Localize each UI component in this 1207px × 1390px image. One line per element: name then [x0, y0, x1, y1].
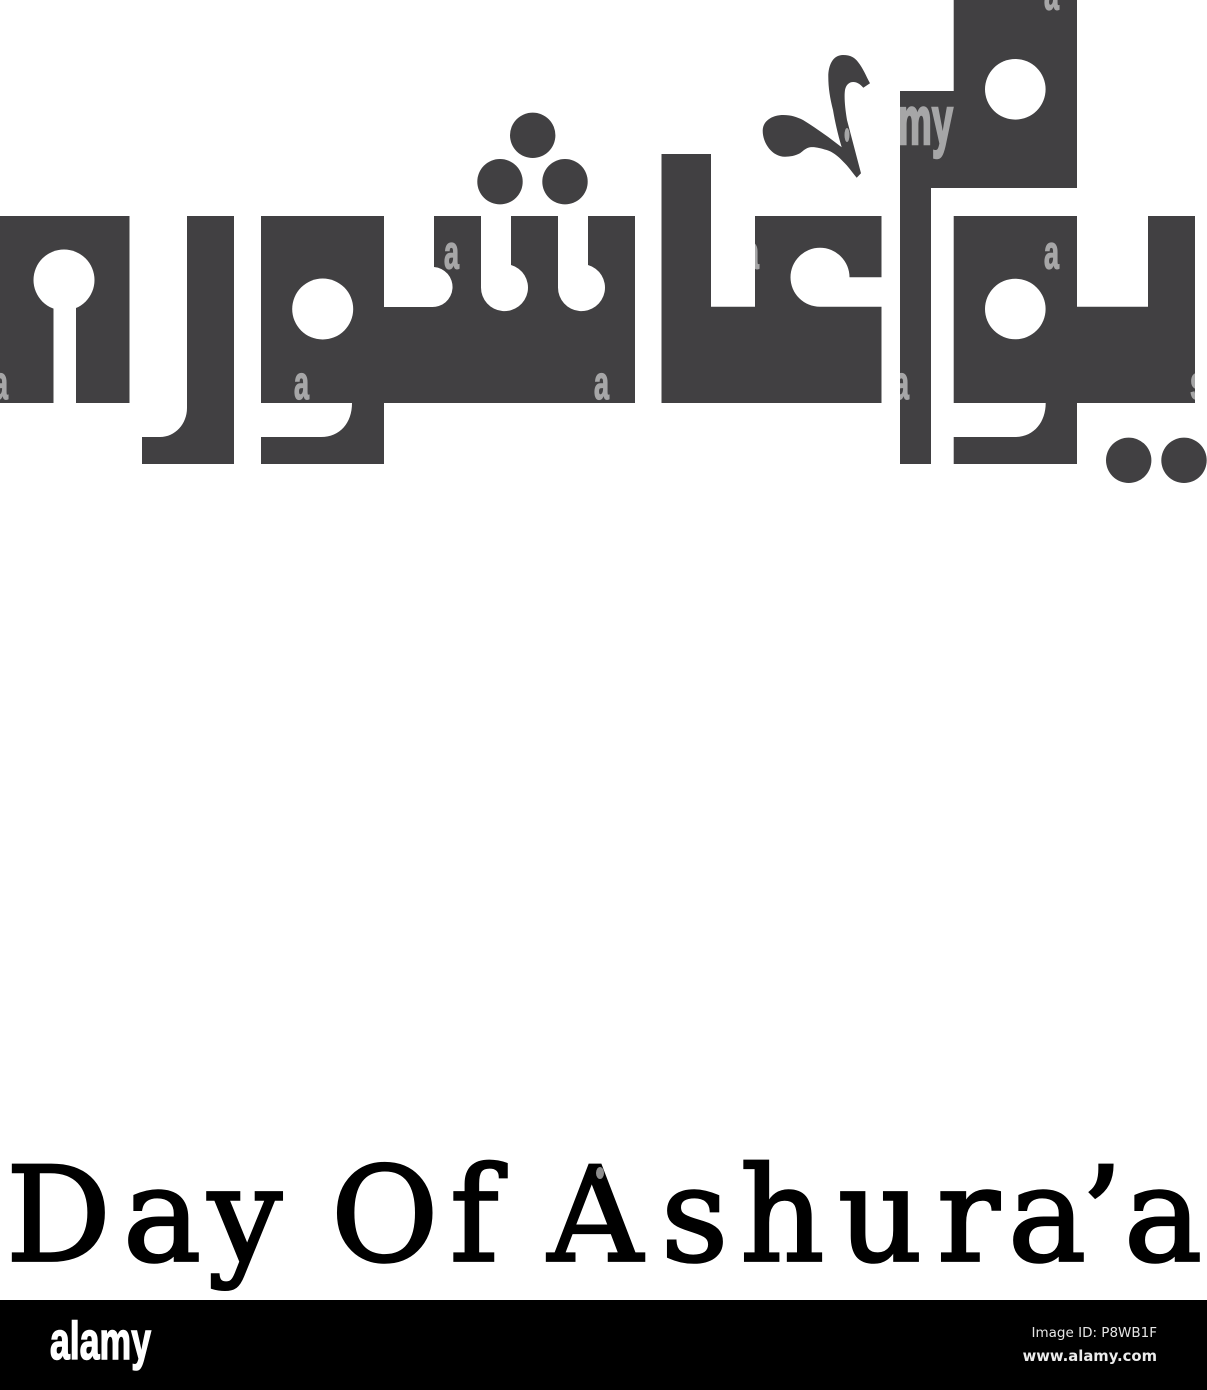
watermark: stock marks over calligraphy: my: [898, 83, 953, 159]
heading: Day Of Ashura'a: Day Of Ashura’a: [6, 1138, 1202, 1292]
watermark: stock marks over calligraphy: a: [894, 356, 909, 409]
watermark: stock marks over calligraphy: a: [294, 356, 309, 409]
text: image ID: Image ID: P8WB1F: [1032, 1325, 1157, 1341]
icon: two dots below yaa: [1106, 438, 1207, 483]
watermark: stock marks over calligraphy: a: [1044, 226, 1059, 278]
watermark: stock marks over calligraphy: a: [744, 226, 759, 278]
letter: meem with long stem: [900, 0, 1077, 464]
text: website: www.alamy.com: [1023, 1348, 1157, 1365]
icon: three dots above sheen: [477, 113, 588, 204]
logo: alamy wordmark: alamy: [50, 1312, 151, 1371]
icon: hamza mark: [763, 55, 870, 178]
watermark: stock marks over calligraphy: a: [444, 226, 459, 278]
letter: waw joined to sheen: [261, 216, 635, 464]
letter: haa with keyhole counter: [0, 216, 130, 403]
watermark: stock marks over calligraphy: a: [594, 356, 609, 409]
watermark: stock marks over calligraphy: [0, 0, 1205, 409]
letter: alef and ayn: [662, 154, 882, 403]
calligraphy: Arabic Kufic title: [0, 0, 1207, 483]
letter: raa tail: [142, 216, 234, 464]
letter: yaa: [954, 216, 1195, 464]
footer bar: [0, 1300, 1207, 1390]
